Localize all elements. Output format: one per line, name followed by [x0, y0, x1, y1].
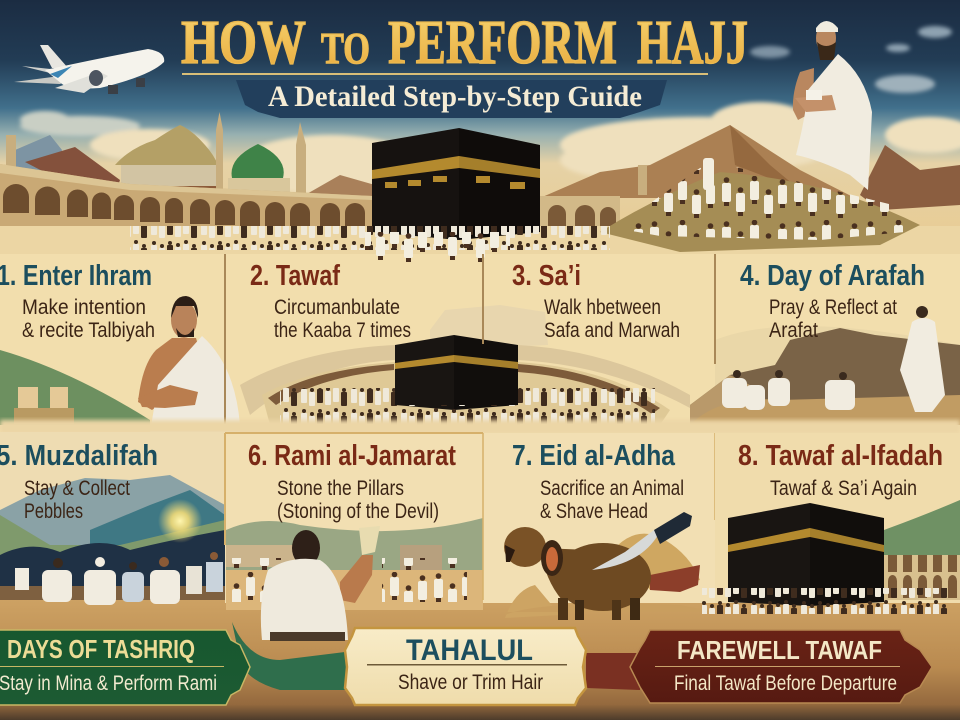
description: Arafat: [769, 319, 818, 342]
man in ihram: [138, 296, 240, 432]
fort: [14, 387, 74, 424]
description: [24, 477, 130, 523]
subtitle ribbon: A Detailed Step-by-Step Guide: [268, 80, 642, 113]
banner: tahalul: Shave or Trim Hair: [398, 671, 543, 694]
red ribbon: [586, 653, 640, 690]
low wall: [0, 586, 225, 600]
description: & Shave Head: [540, 500, 648, 523]
imam in white robe: [793, 21, 872, 190]
banner: farewell tawaf: [630, 630, 932, 703]
description: & recite Talbiyah: [22, 319, 155, 342]
kaaba: [728, 503, 884, 606]
panel: step 7 eid al-adha: [483, 433, 715, 620]
description: step 2: [274, 296, 411, 342]
description: step 2: Circumanbulate: [274, 296, 400, 319]
pilgrim crowd on hill: [600, 158, 920, 252]
pilgrims: [15, 552, 223, 605]
description: Tawaf & Sa’i Again: [770, 477, 917, 500]
crowd: [702, 588, 950, 614]
panel: step 2 and 3 courtyard scene: [240, 305, 690, 425]
green ribbon: [232, 622, 348, 690]
sand mound: [618, 534, 700, 590]
man throwing pebbles: [261, 526, 380, 641]
description: [769, 296, 897, 342]
kaaba tawaf: [395, 335, 518, 410]
banner: days of tashriq: Stay in Mina & Perform Rami: [0, 672, 217, 695]
banner: days of tashriq: DAYS OF TASHRIQ: [7, 634, 195, 664]
description: Pebbles: [24, 500, 83, 523]
description: Pray & Reflect at: [769, 296, 897, 319]
panel: step 8 tawaf al-ifadah: [702, 433, 960, 614]
dividers: [224, 254, 716, 424]
icon: airplane: [14, 45, 164, 94]
minarets: [6, 112, 647, 195]
paper band between rows: [0, 420, 960, 434]
description: [540, 477, 684, 523]
ground: [0, 590, 960, 720]
description: step 3: Walk hbetween: [544, 296, 661, 319]
red cloth: [650, 565, 700, 592]
seated pilgrims: [722, 370, 855, 410]
background sky: [0, 0, 960, 240]
heading: 1. Enter Ihram: [0, 260, 152, 292]
description: step 3: Safa and Marwah: [544, 319, 680, 342]
description: step 3: [544, 296, 680, 342]
title: HAJJ: [637, 9, 748, 77]
hill scenery: [0, 350, 150, 425]
description: Sacrifice an Animal: [540, 477, 684, 500]
title: PERFORM: [388, 9, 617, 77]
title divider: [182, 73, 708, 75]
panel: step 6 rami al-jamarat: [225, 433, 483, 641]
crowd in foreground under kaaba: [365, 232, 510, 262]
clouds: [20, 26, 960, 195]
banner: farewell tawaf: Final Tawaf Before Departure: [674, 672, 897, 695]
parchment base: [0, 254, 960, 434]
description: Stay & Collect: [24, 477, 130, 500]
crowd front of tawaf kaaba: [390, 405, 520, 425]
heading: step 2: 2. Tawaf: [250, 260, 340, 292]
panel: step 5 muzdalifah: [0, 432, 225, 605]
description: [277, 477, 439, 523]
heading: 6. Rami al-Jamarat: [248, 440, 456, 472]
banner: farewell tawaf: FAREWELL TAWAF: [677, 635, 882, 665]
crowd: [230, 558, 290, 602]
kaaba main: [372, 128, 540, 240]
title: TO: [321, 24, 370, 73]
description: Stone the Pillars: [277, 477, 404, 500]
heading: 4. Day of Arafah: [740, 260, 925, 292]
mosque with golden dome: [115, 125, 218, 195]
arcade left: [0, 164, 372, 238]
description: step 2: the Kaaba 7 times: [274, 319, 411, 342]
standing pilgrim: [900, 306, 945, 412]
panel: step 1 enter ihram: [0, 260, 240, 432]
title: [181, 9, 748, 77]
heading: step 3: 3. Sa’i: [512, 260, 581, 292]
heading: 5. Muzdalifah: [0, 440, 158, 472]
sand band: [0, 226, 960, 262]
description: (Stoning of the Devil): [277, 500, 439, 523]
banner: days of tashriq: [0, 630, 250, 705]
mountains: [15, 125, 960, 210]
knife: [592, 512, 692, 570]
sun glow: [158, 499, 202, 543]
heading: 7. Eid al-Adha: [512, 440, 676, 472]
banner: tahalul: [345, 628, 586, 705]
green dome: [228, 144, 290, 196]
description: Make intention: [22, 296, 146, 319]
description: [22, 296, 155, 342]
crowd along kaaba base: [130, 226, 610, 250]
sheep: [504, 527, 651, 620]
panel: step 4 arafah: [690, 260, 960, 425]
arcade right: [540, 196, 620, 234]
title: HOW: [181, 9, 306, 77]
banner: tahalul: TAHALUL: [406, 634, 533, 667]
